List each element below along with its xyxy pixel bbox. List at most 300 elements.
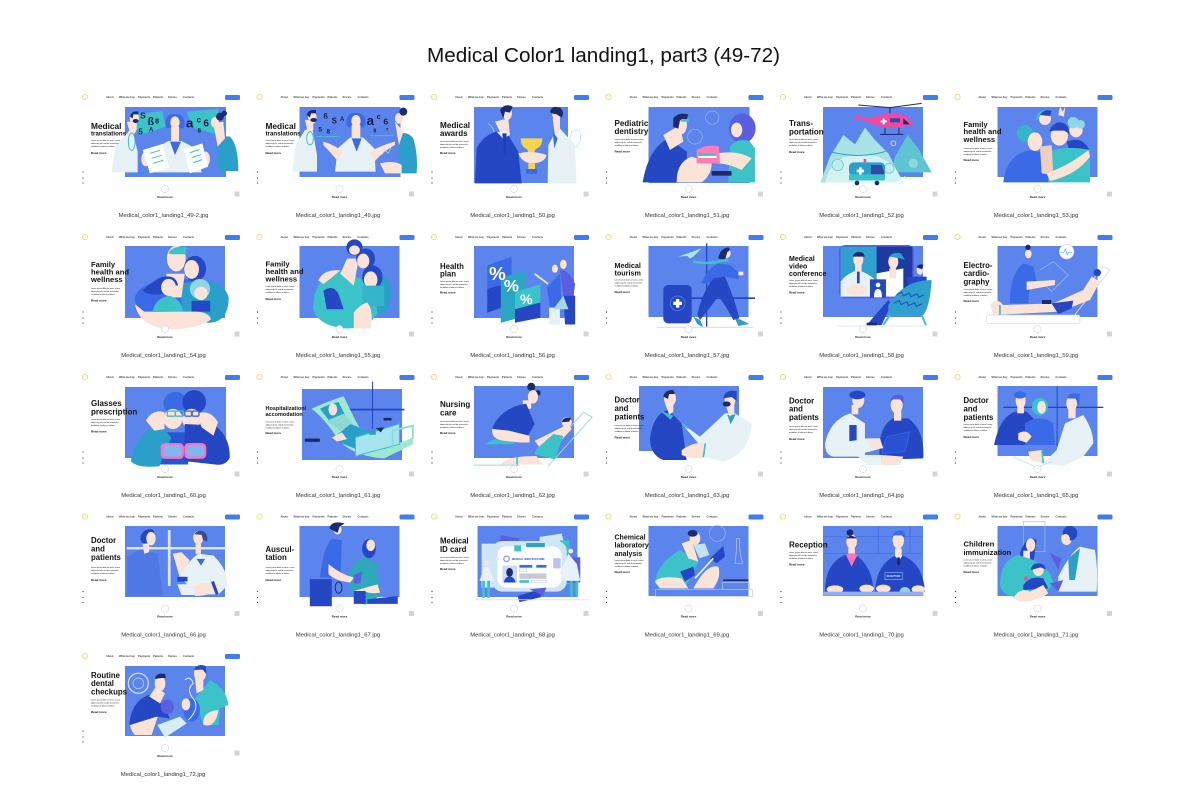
illustration: translators: 6 (203, 119, 209, 130)
text block (964, 261, 993, 303)
illustration panel (823, 526, 923, 596)
nav, footer and filename: What we buy (119, 95, 135, 99)
illustration panel (300, 246, 400, 318)
text block: Read more (964, 158, 979, 162)
nav, footer and filename: Read more (681, 195, 697, 199)
nav, footer and filename: Patients (328, 95, 338, 99)
text block: incididunt ut labore et dolore (266, 291, 289, 294)
text block: wellness (90, 275, 123, 284)
text block: Read more (789, 562, 805, 566)
text block: tation (266, 553, 287, 562)
nav, footer and filename: Payments (487, 514, 500, 518)
nav, footer and filename: What we buy (992, 235, 1008, 239)
text block: laboratory (614, 542, 649, 550)
nav, footer and filename: Read more (332, 195, 348, 199)
nav, footer and filename: What we buy (119, 375, 135, 379)
illustration: medical identification card (475, 534, 589, 602)
nav, footer and filename: Contacts (358, 514, 369, 518)
card: Health plan (431, 234, 589, 359)
nav, footer and filename: Read more (855, 335, 871, 339)
nav, footer and filename: Payments (138, 375, 151, 379)
text block: Lorem ipsum dolor sit amet, conse (266, 285, 294, 288)
text block: adipiscing elit, sed do eiusmod te (266, 424, 293, 426)
card: Transportation (780, 94, 938, 219)
text block: Medical (91, 121, 121, 131)
nav, footer and filename (431, 514, 589, 638)
nav, footer and filename: About (630, 375, 637, 379)
illustration panel (998, 526, 1098, 596)
nav, footer and filename: Patients (153, 95, 164, 99)
nav, footer and filename: Payments (662, 514, 674, 518)
nav, footer and filename: Medical_color1_landing1_72.jpg (121, 772, 205, 778)
text block (440, 121, 470, 155)
text block: adipiscing elit, sed do eiusmod te (789, 428, 817, 431)
illustration: dentists with patient (128, 665, 228, 738)
text block: prescription (91, 408, 137, 416)
text block: Pediatric (614, 119, 649, 128)
nav, footer and filename: Payments (138, 514, 151, 518)
text block: incididunt ut labore et dolore (789, 285, 813, 288)
illustration: translators: a (186, 115, 194, 130)
nav, footer and filename: Read more (157, 475, 173, 479)
text block: incididunt ut labore et dolore (91, 572, 115, 575)
text block: incididunt ut labore et dolore (91, 145, 115, 148)
illustration: percent cards and family (487, 257, 575, 324)
nav, footer and filename: Contacts (881, 514, 893, 518)
card: Family health and wellness 54 (82, 234, 240, 359)
nav, footer and filename: Payments (836, 514, 849, 518)
illustration panel (125, 666, 225, 736)
text block: incididunt ut labore et dolore (440, 562, 464, 565)
card: Medical video conference (780, 234, 938, 359)
nav, footer and filename: Patients (153, 514, 164, 518)
nav, footer and filename: Read more (1030, 335, 1046, 339)
text block: Lorem ipsum dolor sit amet, conse (789, 425, 818, 428)
nav, footer and filename: Patients (676, 514, 687, 518)
nav, footer and filename: About (978, 95, 986, 99)
nav, footer and filename: What we buy (119, 235, 135, 239)
text block: incididunt ut labore et dolore (964, 564, 987, 568)
nav, footer and filename: Contacts (358, 95, 369, 99)
nav, footer and filename: What we buy (294, 95, 310, 99)
nav, footer and filename: What we buy (992, 375, 1008, 379)
text block: adipiscing elit, sed do eiusmod te (91, 702, 119, 704)
text block: patients (614, 412, 645, 422)
text block: Read more (614, 290, 630, 294)
text block (91, 121, 127, 155)
text block: Doctor (789, 396, 814, 406)
nav, footer and filename: Read more (506, 195, 522, 199)
nav, footer and filename: Medical_color1_landing1_62.jpg (470, 493, 555, 499)
nav, footer and filename: Contacts (532, 514, 544, 518)
illustration: translators: 8 (198, 128, 202, 134)
text block (789, 540, 828, 566)
text block: portation (789, 128, 824, 136)
text block: Lorem ipsum dolor sit amet, conse (440, 420, 469, 423)
nav, footer and filename: Contacts (706, 375, 718, 379)
text block: immunization (964, 548, 1012, 557)
text block: Medical (266, 121, 296, 131)
illustration: translators: c (197, 115, 202, 124)
nav, footer and filename: Contacts (183, 375, 195, 379)
text block: Family (266, 260, 290, 268)
nav, footer and filename: About (106, 654, 114, 658)
text block (264, 260, 304, 301)
nav, footer and filename: Contacts (183, 95, 195, 99)
nav, footer and filename: Contacts (706, 514, 718, 518)
card: Medical tourism (606, 234, 764, 359)
text block: Reception (789, 540, 828, 550)
nav, footer and filename: Read more (332, 335, 348, 339)
nav, footer and filename: Medical_color1_landing1_52.jpg (819, 213, 904, 219)
nav, footer and filename: Stories (342, 514, 352, 518)
text block: Family (91, 260, 116, 269)
nav, footer and filename: What we buy (119, 514, 135, 518)
nav, footer and filename: Read more (855, 475, 871, 479)
nav, footer and filename: What we buy (294, 235, 310, 239)
nav, footer and filename: About (455, 95, 463, 99)
nav, footer and filename: Medical_color1_landing1_71.jpg (994, 632, 1078, 638)
nav, footer and filename: What we buy (642, 375, 659, 379)
text block: Read more (91, 298, 107, 302)
text block (440, 262, 469, 294)
text block: incididunt ut labore et dolore (91, 293, 115, 296)
nav, footer and filename: Payments (487, 375, 500, 379)
nav, footer and filename: Contacts (183, 235, 195, 239)
text block: Glasses (91, 399, 122, 408)
nav, footer and filename: Patients (1026, 514, 1036, 518)
illustration: percent cards and family: % (504, 276, 519, 295)
nav, footer and filename: What we buy (119, 654, 135, 658)
text block: Lorem ipsum dolor sit amet, conse (964, 147, 992, 150)
nav, footer and filename: Patients (676, 235, 687, 239)
text block (440, 536, 469, 571)
nav, footer and filename: Read more (332, 614, 348, 618)
text block: Lorem ipsum dolor sit amet, conse (614, 559, 643, 562)
nav, footer and filename: Read more (681, 475, 697, 479)
text block (962, 120, 1002, 162)
nav, footer and filename: Medical_color1_landing1_61.jpg (296, 493, 380, 499)
nav, footer and filename: What we buy (294, 514, 310, 518)
text block: Children (964, 540, 995, 548)
text block: incididunt ut labore et dolore (440, 146, 464, 149)
illustration: couple with glasses (131, 390, 230, 467)
nav, footer and filename: Stories (866, 375, 875, 379)
nav, footer and filename (431, 374, 589, 499)
card: Children immunization (955, 514, 1112, 638)
nav, footer and filename: Contacts (1056, 514, 1067, 518)
illustration: patient in bed (305, 382, 413, 458)
nav, footer and filename: About (804, 235, 812, 239)
nav, footer and filename: Patients (851, 235, 862, 239)
nav, footer and filename: Contacts (532, 375, 544, 379)
text block: and (91, 544, 105, 554)
text block (964, 396, 994, 439)
nav, footer and filename: About (630, 95, 637, 99)
text block: wellness (264, 274, 297, 284)
text block: conference (789, 271, 826, 278)
nav, footer and filename: Read more (506, 335, 522, 339)
nav, footer and filename: Stories (168, 95, 177, 99)
text block: adipiscing elit, sed do eiusmod te (789, 282, 817, 285)
nav, footer and filename: Medical_color1_landing1_70.jpg (819, 632, 904, 638)
text block: dentistry (614, 127, 649, 136)
card: Reception (780, 514, 938, 638)
nav, footer and filename: Read more (506, 614, 522, 618)
nav, footer and filename: About (106, 95, 114, 99)
text block: Medical (440, 536, 469, 546)
nav, footer and filename (955, 514, 1112, 638)
text block: incididunt ut labore et dolore (266, 426, 289, 430)
nav, footer and filename: Patients (1026, 375, 1036, 379)
text block: Lorem ipsum dolor sit amet, conse (614, 424, 643, 427)
nav, footer and filename: Medical_color1_landing1_55.jpg (296, 353, 380, 359)
nav, footer and filename: Payments (312, 235, 325, 239)
text block: adipiscing elit, sed do eiusmod te (266, 569, 293, 572)
card: Family health and wellness 53 (955, 94, 1112, 219)
nav, footer and filename: Payments (1010, 375, 1023, 379)
nav, footer and filename: What we buy (992, 514, 1008, 518)
text block: Read more (266, 297, 281, 301)
illustration: translators with open hands (292, 108, 417, 173)
text block: Medical (789, 256, 815, 263)
nav, footer and filename: What we buy (468, 375, 484, 379)
text block: incididunt ut labore et dolore (964, 294, 987, 297)
text block (266, 545, 294, 582)
text block: incididunt ut labore et dolore (266, 572, 289, 575)
text block: Read more (964, 435, 979, 439)
nav, footer and filename: Contacts (881, 375, 893, 379)
text block: incididunt ut labore et dolore (440, 426, 464, 429)
nav, footer and filename: Payments (662, 95, 674, 99)
text block: and (614, 404, 629, 413)
text block: graphy (964, 278, 990, 286)
nav, footer and filename (82, 94, 240, 219)
nav, footer and filename: Contacts (881, 235, 893, 239)
nav, footer and filename: Medical_color1_landing1_58.jpg (819, 353, 904, 359)
illustration: translators with open hands: ? (386, 127, 389, 132)
text block: Electro- (964, 261, 993, 270)
nav, footer and filename (431, 94, 589, 219)
text block: cardio- (964, 269, 990, 278)
text block: incididunt ut labore et dolore (614, 284, 638, 288)
nav, footer and filename: Payments (662, 375, 674, 379)
illustration: medical identification card: MEDICAL IDENTIFICATION (512, 557, 545, 561)
text block: adipiscing elit, sed do eiusmod te (266, 142, 293, 145)
text block: incididunt ut labore et dolore (91, 424, 115, 427)
nav, footer and filename: Medical_color1_landing1_68.jpg (470, 632, 555, 638)
text block: Lorem ipsum dolor sit amet, conse (789, 551, 818, 554)
nav, footer and filename: What we buy (817, 95, 833, 99)
nav, footer and filename: What we buy (642, 235, 659, 239)
text block: adipiscing elit, sed do eiusmod te (614, 141, 642, 144)
illustration panel (998, 386, 1098, 456)
nav, footer and filename: About (106, 514, 114, 518)
nav, footer and filename: Contacts (183, 654, 195, 658)
nav, footer and filename: What we buy (642, 95, 659, 99)
illustration: translators with open hands: S (332, 116, 338, 125)
illustration panel (648, 246, 748, 317)
text block: Lorem ipsum dolor sit amet, conse (91, 566, 120, 569)
text block (789, 119, 824, 154)
nav, footer and filename: Payments (487, 95, 500, 99)
illustration: translators (112, 109, 238, 173)
text block: adipiscing elit, sed do eiusmod te (964, 291, 991, 294)
nav, footer and filename: Medical_color1_landing1_60.jpg (121, 493, 206, 499)
text block: adipiscing elit, sed do eiusmod te (964, 150, 991, 153)
illustration panel (998, 107, 1098, 177)
text block: Lorem ipsum dolor sit amet, conse (440, 280, 469, 283)
nav, footer and filename: Read more (855, 614, 871, 618)
nav, footer and filename: Stories (1040, 375, 1050, 379)
nav, footer and filename: Payments (1010, 514, 1023, 518)
nav, footer and filename (780, 94, 938, 219)
text block: Family (964, 120, 988, 129)
text block: Lorem ipsum dolor sit amet, conse (789, 138, 818, 141)
illustration: translators with open hands: A (340, 117, 345, 123)
nav, footer and filename: Patients (851, 514, 862, 518)
text block: and (789, 404, 803, 414)
nav, footer and filename: Patients (153, 375, 164, 379)
illustration: receptionists (823, 526, 925, 596)
nav, footer and filename: Medical_color1_landing1_66.jpg (121, 632, 206, 638)
nav, footer and filename: What we buy (642, 514, 659, 518)
nav, footer and filename: Payments (312, 375, 325, 379)
nav, footer and filename (606, 234, 764, 359)
nav, footer and filename: Stories (692, 375, 701, 379)
nav, footer and filename: Patients (328, 514, 338, 518)
nav, footer and filename: Payments (1010, 95, 1023, 99)
nav, footer and filename: Payments (1010, 235, 1023, 239)
nav, footer and filename: Read more (157, 614, 173, 618)
nav, footer and filename: Read more (157, 195, 173, 199)
nav, footer and filename (257, 514, 414, 638)
nav, footer and filename: Medical_color1_landing1_65.jpg (994, 493, 1078, 499)
nav, footer and filename: Medical_color1_landing1_57.jpg (645, 353, 729, 359)
nav, footer and filename: Medical_color1_landing1_64.jpg (819, 493, 904, 499)
text block: Hospitalization/ (266, 406, 307, 412)
nav, footer and filename: Patients (502, 95, 513, 99)
nav, footer and filename: Stories (342, 95, 352, 99)
nav, footer and filename: What we buy (294, 375, 310, 379)
illustration: translators with open hands: 5 (318, 127, 322, 134)
nav, footer and filename: Medical_color1_landing1_51.jpg (645, 213, 729, 219)
nav, footer and filename: Read more (157, 754, 173, 758)
text block: Read more (964, 570, 979, 574)
card: Medical translations 49 (257, 94, 417, 219)
nav, footer and filename: Patients (153, 235, 164, 239)
nav, footer and filename: About (106, 375, 114, 379)
nav, footer and filename: Medical_color1_landing1_53.jpg (994, 213, 1078, 219)
illustration: percent cards and family: % (489, 264, 506, 285)
illustration panel (302, 389, 402, 460)
text block: Read more (91, 710, 107, 714)
text block: tourism (614, 268, 641, 278)
illustration: hugging family (1003, 107, 1090, 182)
nav, footer and filename: About (280, 235, 288, 239)
nav, footer and filename: Stories (342, 375, 352, 379)
text block: Lorem ipsum dolor sit amet, conse (91, 139, 120, 142)
nav, footer and filename (606, 94, 764, 219)
nav, footer and filename: Patients (851, 375, 862, 379)
illustration: doctor greets patient (650, 390, 752, 462)
nav, footer and filename: Patients (851, 95, 862, 99)
illustration: patient on ECG bed (987, 244, 1110, 324)
text block: Read more (440, 431, 456, 435)
nav, footer and filename: What we buy (468, 235, 484, 239)
text block: plan (440, 270, 456, 278)
nav, footer and filename (780, 234, 938, 359)
text block: Lorem ipsum dolor sit amet, conse (614, 278, 643, 282)
text block: Lorem ipsum dolor sit amet, conse (964, 288, 992, 291)
text block: accomodation (266, 412, 303, 418)
text block: care (440, 408, 457, 418)
text block (789, 256, 826, 294)
text block: adipiscing elit, sed do eiusmod te (789, 554, 817, 557)
nav, footer and filename: About (978, 514, 986, 518)
nav, footer and filename: Read more (681, 614, 697, 618)
nav, footer and filename: What we buy (817, 235, 833, 239)
nav, footer and filename: Medical_color1_landing1_54.jpg (121, 353, 206, 359)
text block: adipiscing elit, sed do eiusmod te (440, 559, 468, 562)
nav, footer and filename: Contacts (183, 514, 195, 518)
nav, footer and filename: About (978, 375, 986, 379)
text block: adipiscing elit, sed do eiusmod te (440, 143, 468, 146)
text block (440, 400, 470, 435)
text block: Read more (614, 436, 630, 440)
nav, footer and filename: Medical_color1_landing1_69.jpg (645, 632, 729, 638)
nav, footer and filename: Payments (138, 95, 151, 99)
card: Nursing care (431, 374, 592, 499)
nav, footer and filename: Read more (157, 335, 173, 339)
nav, footer and filename: Stories (1040, 95, 1050, 99)
text block: patients (964, 413, 994, 422)
illustration panel (125, 526, 225, 597)
nav, footer and filename: Read more (855, 195, 871, 199)
text block: Nursing (440, 400, 470, 409)
text block: incididunt ut labore et dolore (614, 144, 638, 147)
nav, footer and filename: About (106, 235, 114, 239)
text block: Read more (266, 578, 281, 582)
text block: Read more (789, 437, 805, 441)
card: Auscultation (257, 514, 414, 638)
illustration: translators: ß (148, 116, 155, 128)
nav, footer and filename: Payments (138, 235, 151, 239)
text block: checkups (91, 688, 128, 696)
text block: Health (440, 262, 464, 271)
illustration: translators with open hands: c (377, 112, 381, 121)
nav, footer and filename: Payments (138, 654, 151, 658)
nav, footer and filename: Patients (153, 654, 164, 658)
nav, footer and filename (82, 514, 240, 638)
illustration: translators: A (149, 128, 154, 134)
nav, footer and filename: Stories (168, 514, 177, 518)
nav, footer and filename: Read more (681, 335, 697, 339)
text block: incididunt ut labore et dolore (614, 430, 638, 433)
text block (266, 121, 301, 155)
card: Chemical laboratory analysis (606, 514, 764, 638)
nav, footer and filename: Medical_color1_landing1_50.jpg (470, 213, 555, 219)
nav, footer and filename: Stories (1040, 514, 1050, 518)
text block: incididunt ut labore et dolore (789, 557, 813, 560)
nav, footer and filename: Stories (342, 235, 352, 239)
text block: Lorem ipsum dolor sit amet, conse (266, 566, 294, 569)
text block: Read more (789, 290, 805, 294)
illustration panel (125, 246, 225, 318)
text block: wellness (962, 135, 995, 144)
nav, footer and filename: Contacts (1056, 375, 1067, 379)
illustration: nurse with patient (474, 383, 592, 466)
